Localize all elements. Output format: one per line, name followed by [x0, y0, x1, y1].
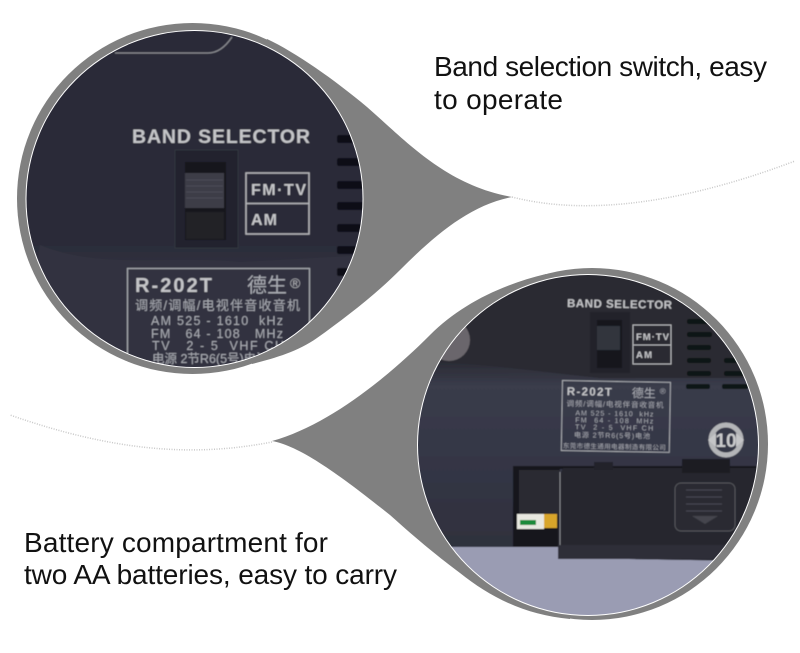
band switch — [175, 150, 238, 248]
band position labels: FM·TV — [251, 182, 306, 199]
specification label: 德生 — [247, 274, 287, 297]
specification label — [561, 381, 670, 452]
specification label: R-202T — [567, 386, 612, 399]
battery door — [558, 459, 760, 561]
band position labels — [246, 173, 309, 234]
callout text: battery compartment: two AA batteries, easy to carry — [24, 559, 397, 590]
specification label: AM 525 - 1610 kHz — [575, 410, 654, 419]
icon: 10-year recycling mark — [708, 425, 744, 455]
specification label: TV 2 - 5 VHF CH — [575, 424, 653, 433]
specification label — [126, 267, 311, 366]
magnifier 1: zoomed photo of band selector — [26, 30, 364, 368]
specification label: 电源 2节R6(5号)电池 — [152, 352, 269, 366]
band position labels — [633, 325, 671, 364]
battery compartment — [513, 466, 763, 547]
speaker vents — [337, 135, 365, 276]
door latch — [675, 483, 735, 531]
callout text: battery compartment: Battery compartment for — [24, 527, 328, 558]
callout text: band selection switch: Band selection switch, easy — [434, 51, 767, 82]
band position labels: AM — [251, 212, 277, 229]
icon: 10-year recycling mark: 10 — [715, 431, 737, 452]
specification label: R-202T — [135, 275, 212, 297]
heading: band selector: BAND SELECTOR — [567, 298, 673, 312]
specification label: 电源 2节R6(5号)电池 — [574, 430, 650, 441]
callout text: band selection switch: to operate — [434, 84, 563, 115]
specification label: AM 525 - 1610 kHz — [151, 314, 283, 328]
magnifier 1: grey teardrop pointer — [17, 23, 512, 374]
callout text: battery compartment — [24, 527, 397, 590]
screw at the edge — [441, 327, 470, 362]
specification label: ® — [660, 387, 666, 396]
specification label: FM 64 - 108 MHz — [575, 417, 654, 426]
specification label: 调频/调幅/电视伴音收音机 — [567, 398, 664, 410]
magnifier 2: grey teardrop pointer — [272, 268, 768, 620]
specification label: 东莞市德生通用电器制造有限公司 — [563, 441, 666, 452]
magnifier 2: zoomed photo of radio back — [415, 272, 763, 618]
band position labels: FM·TV — [636, 332, 670, 343]
dotted line: battery callout — [10, 415, 272, 450]
heading: band selector: BAND SELECTOR — [132, 126, 310, 148]
radio top edge detail — [115, 37, 232, 53]
band switch — [596, 320, 622, 368]
specification label: TV 2 - 5 VHF CH — [152, 339, 284, 353]
specification label: 调频/调幅/电视伴音收音机 — [135, 298, 300, 313]
callout text: band selection switch — [434, 51, 767, 115]
speaker vents — [686, 319, 748, 389]
table surface — [452, 546, 714, 615]
AA battery — [517, 514, 557, 529]
specification label: ® — [290, 275, 301, 291]
specification label: 德生 — [632, 385, 656, 401]
dotted line: band selector callout — [512, 161, 795, 206]
band position labels: AM — [636, 350, 652, 361]
specification label: FM 64 - 108 MHz — [151, 327, 283, 341]
